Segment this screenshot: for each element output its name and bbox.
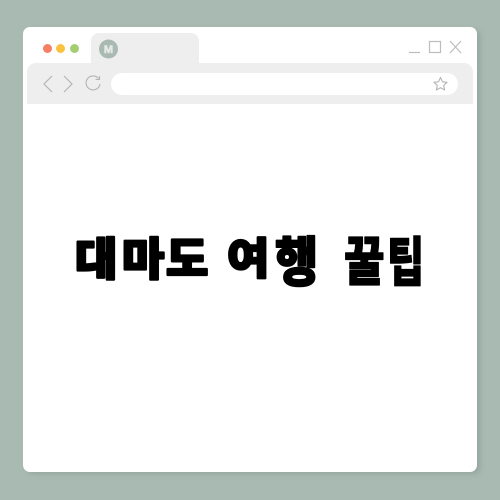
- icon: reload: [86, 76, 100, 90]
- toolbar: [27, 63, 473, 104]
- title: [75, 233, 424, 293]
- address bar: [111, 73, 458, 95]
- icon: minimize: [409, 52, 420, 54]
- icon: bookmark star: [434, 78, 447, 90]
- title: 팁: [387, 234, 424, 293]
- title: 마: [122, 234, 164, 285]
- icon: maximize: [430, 42, 440, 52]
- icon: close: [450, 41, 461, 53]
- title: 행: [275, 233, 318, 293]
- title: 꿀: [344, 233, 385, 292]
- icon: back arrow: [44, 76, 52, 92]
- window control dots: [43, 44, 79, 53]
- title: 대: [75, 234, 117, 285]
- title: 도: [166, 234, 208, 285]
- active tab: [91, 33, 199, 64]
- icon: forward arrow: [64, 76, 72, 92]
- title: 여: [227, 236, 269, 284]
- icon: tab favicon: M: [104, 44, 113, 56]
- icon: tab favicon: [99, 40, 118, 58]
